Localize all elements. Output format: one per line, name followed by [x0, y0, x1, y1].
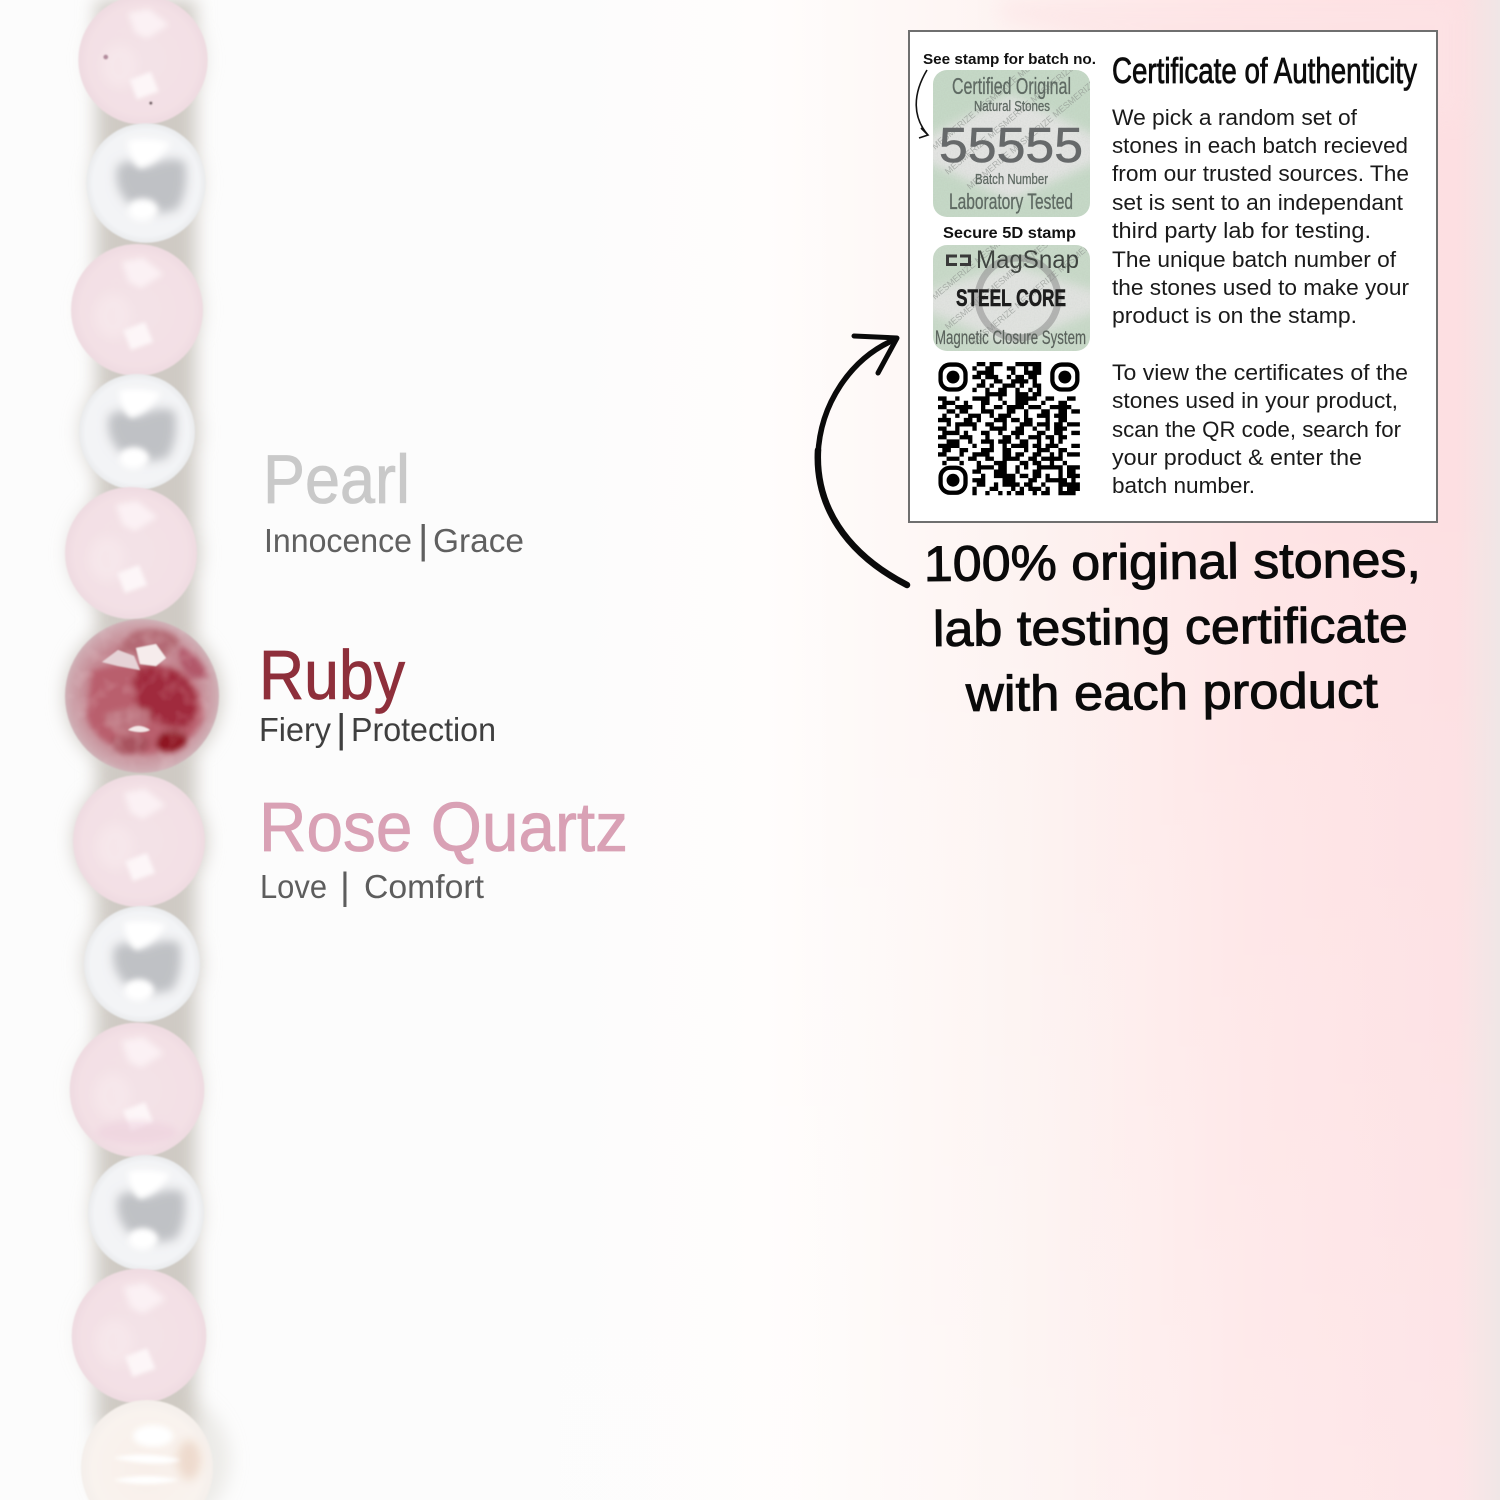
text: Rose Quartz meaning: Comfort	[364, 868, 484, 905]
text: Pearl meaning	[264, 518, 524, 562]
headline: original stones claim	[924, 532, 1421, 722]
bead: rose quartz 5	[70, 1023, 204, 1157]
bead: pearl 1	[86, 123, 206, 243]
text: certificate explanation: third party lab for testing.	[1112, 218, 1371, 243]
bead: rose quartz 3	[65, 487, 197, 619]
small arrow to stamp	[916, 70, 928, 138]
text: how to view certificates: stones used in your product,	[1112, 388, 1398, 413]
stamp: batch number: MESMERIZE MESMERIZE MESMERIZE	[965, 77, 1098, 192]
stamp: MagSnap steel core: MESMERIZE MESMERIZE MESMERIZE	[943, 217, 1076, 332]
stamp: MagSnap steel core: MESMERIZE MESMERIZE MESMERIZE	[970, 232, 1103, 347]
bead: pearl 2	[79, 374, 195, 490]
text: certificate explanation: product is on the stamp.	[1112, 303, 1357, 328]
text: Pearl meaning: Grace	[433, 522, 524, 559]
bead: rose quartz 2	[71, 244, 203, 376]
bead: ruby	[65, 619, 219, 773]
bead: rose quartz 6	[72, 1269, 206, 1403]
text: Ruby meaning: Fiery	[259, 711, 331, 748]
stamp: MagSnap steel core: Magnetic Closure System	[935, 328, 1086, 349]
text: Pearl meaning: |	[418, 518, 428, 562]
heading: Ruby: Ruby	[259, 636, 405, 714]
text: how to view certificates: scan the QR code, search for	[1112, 417, 1401, 442]
bead: freshwater pearl	[81, 1400, 213, 1500]
text: Rose Quartz meaning: Love	[260, 868, 327, 905]
text: certificate explanation: We pick a random set of	[1112, 105, 1358, 130]
bead: rose quartz 1	[78, 0, 208, 125]
arrow: curved to certificate	[818, 336, 907, 585]
text: certificate explanation: from our trusted sources. The	[1112, 161, 1409, 186]
QR code	[938, 364, 1080, 493]
headline: original stones claim: lab testing certificate	[933, 597, 1408, 657]
bead: pearl 3	[84, 906, 200, 1022]
stamp: MagSnap steel core	[933, 245, 1090, 351]
text: Rose Quartz meaning	[260, 866, 484, 908]
text: how to view certificates: your product & enter the	[1112, 445, 1362, 470]
stamp: batch number: MESMERIZE MESMERIZE MESMERIZE	[930, 37, 1063, 152]
headline: original stones claim: 100% original stones,	[924, 532, 1421, 592]
heading: certificate of authenticity: Certificate of Authenticity	[1112, 50, 1417, 91]
stamp: batch number: Certified Original	[952, 73, 1071, 99]
stamp: batch number: Batch Number	[975, 171, 1048, 188]
panel: certificate of authenticity	[900, 31, 1437, 522]
text: how to view certificates: To view the certificates of the	[1112, 360, 1408, 385]
stamp: MagSnap steel core: STEEL CORE	[956, 285, 1066, 312]
text: how to view certificates: batch number.	[1112, 473, 1255, 498]
text: certificate explanation	[1112, 105, 1410, 328]
stamp: batch number: Natural Stones	[974, 98, 1050, 115]
text: Ruby meaning: |	[336, 707, 346, 751]
heading: Rose Quartz: Rose Quartz	[259, 788, 628, 866]
headline: original stones claim: with each product	[965, 662, 1378, 722]
bead shadow column	[65, 0, 230, 1500]
text: Ruby meaning: Protection	[351, 711, 496, 748]
bracelet: column of beads	[65, 0, 230, 1500]
stamp: batch number: MESMERIZE MESMERIZE MESMERIZE	[943, 62, 1076, 177]
text: certificate explanation: The unique batch number of	[1112, 247, 1397, 272]
text: Rose Quartz meaning: |	[340, 866, 350, 908]
stamp: MagSnap steel core: MESMERIZE MESMERIZE MESMERIZE	[930, 187, 1063, 302]
stamp: batch number: 55555	[939, 119, 1083, 173]
stamp: batch number: Laboratory Tested	[949, 189, 1073, 214]
text: how to view certificates	[1112, 360, 1408, 498]
stamp: batch number	[933, 70, 1090, 217]
caption: see stamp: See stamp for batch no.	[923, 52, 1096, 68]
text: Ruby meaning	[259, 707, 496, 751]
stamp: MagSnap steel core: MagSnap	[976, 246, 1079, 274]
stone label: Ruby	[259, 636, 496, 751]
stone label: Rose Quartz	[259, 788, 628, 908]
text: certificate explanation: stones in each batch recieved	[1112, 133, 1408, 158]
bead: pearl 4	[88, 1155, 204, 1271]
bead: rose quartz 4	[73, 775, 205, 907]
text: certificate explanation: set is sent to an independant	[1112, 190, 1404, 215]
stone label: Pearl	[263, 441, 524, 562]
text: certificate explanation: the stones used to make your	[1112, 275, 1410, 300]
caption: secure stamp: Secure 5D stamp	[943, 225, 1076, 242]
heading: Pearl: Pearl	[263, 441, 410, 518]
text: Pearl meaning: Innocence	[264, 522, 412, 559]
